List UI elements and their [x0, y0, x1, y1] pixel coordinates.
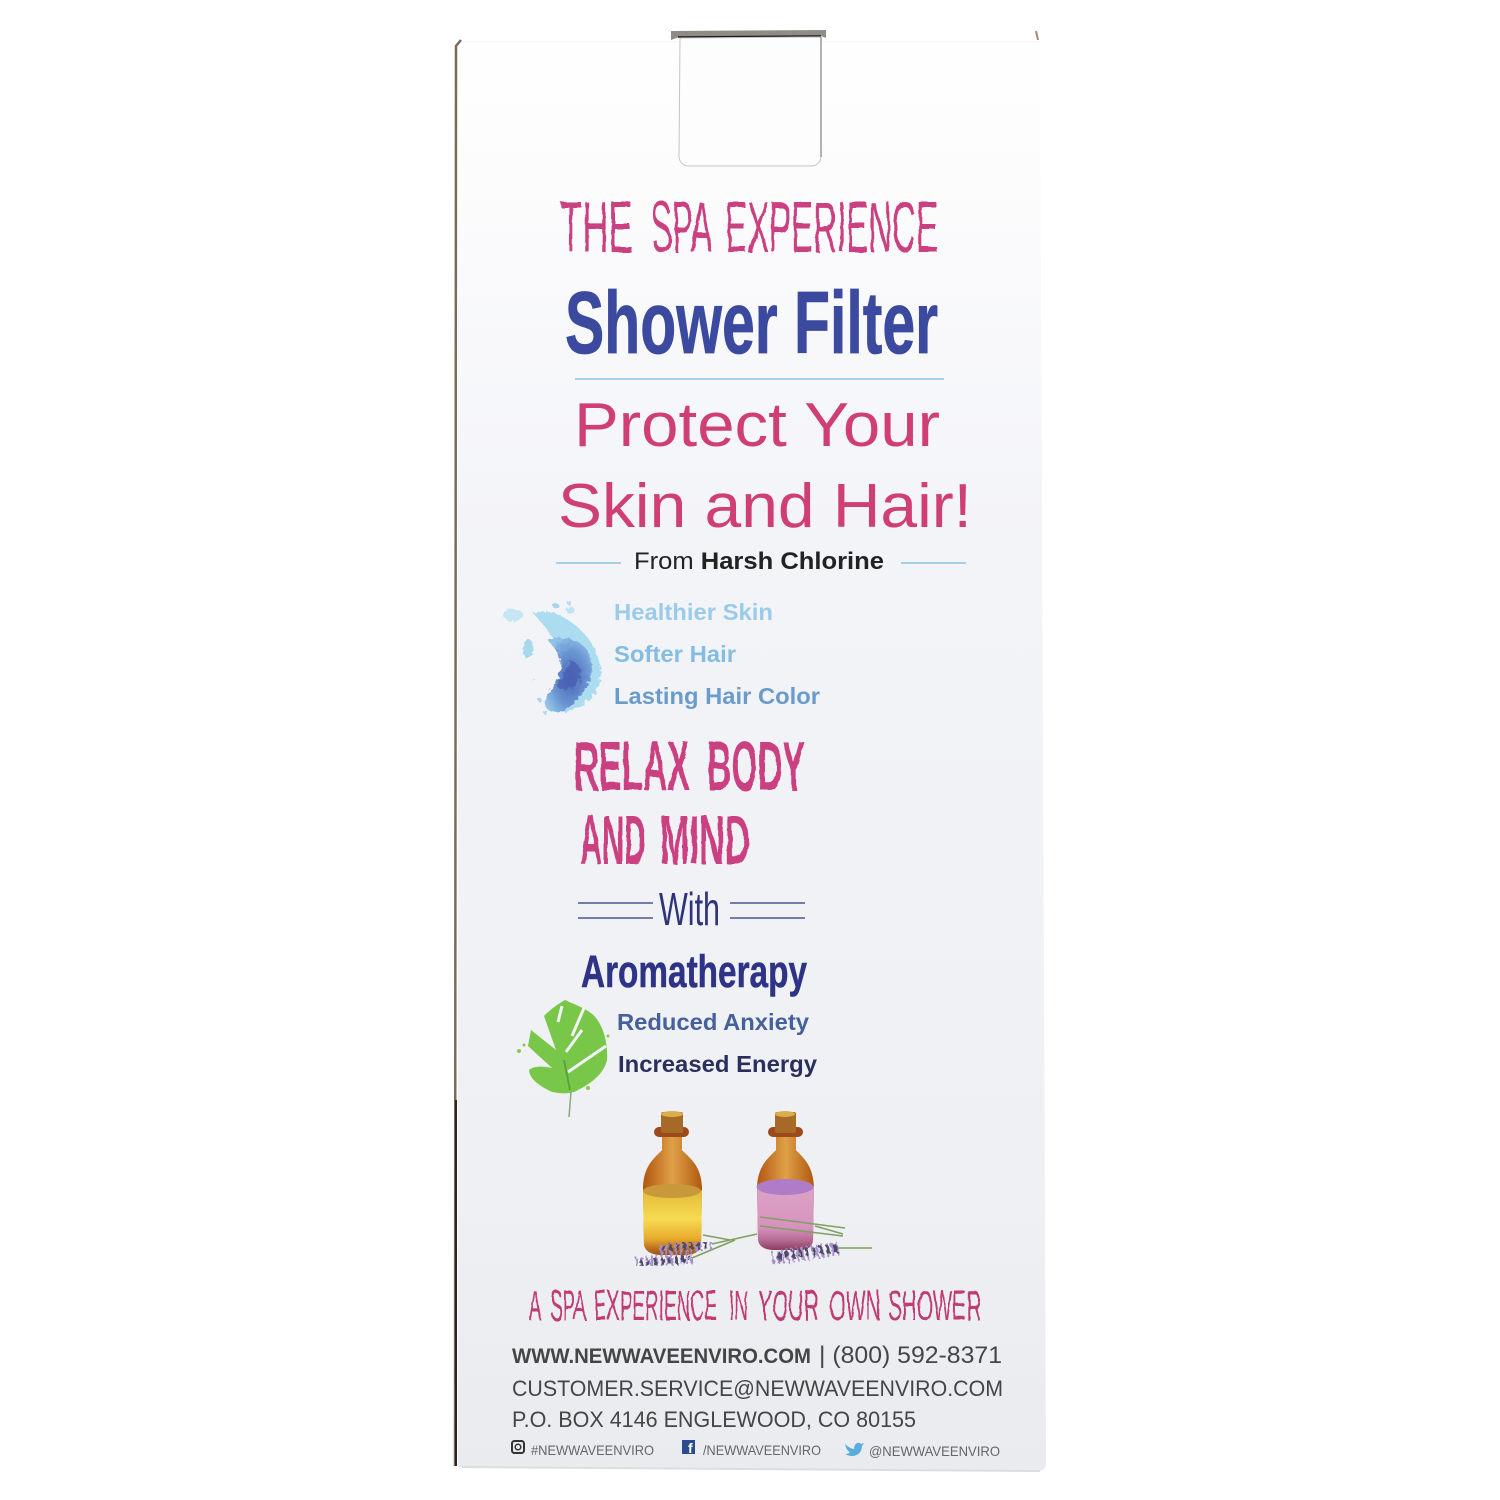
contact details: | (800) 592-8371 — [819, 1342, 1002, 1369]
product box back panel: SHOWER — [888, 1282, 981, 1330]
illustration: amber oil bottle — [643, 1111, 702, 1255]
benefits list: aromatherapy: Increased Energy — [618, 1051, 817, 1077]
product box back panel: BODY — [707, 727, 805, 805]
benefits list: aromatherapy: Reduced Anxiety — [617, 1009, 809, 1035]
illustration: lavender sprigs — [636, 1217, 872, 1264]
subheading: from harsh chlorine: From Harsh Chlorine — [634, 548, 884, 575]
box tab with metal clip — [671, 30, 826, 166]
social: facebook: /NEWWAVEENVIRO — [703, 1442, 821, 1458]
social: twitter: @NEWWAVEENVIRO — [869, 1443, 1000, 1459]
heading: the spa experience: THE — [560, 188, 633, 268]
heading: and mind: MIND — [660, 801, 750, 879]
heading: and mind: AND — [580, 801, 646, 879]
benefits list: skin and hair: Healthier Skin — [614, 599, 773, 625]
text: with: With — [659, 883, 720, 935]
heading: relax body: RELAX — [574, 727, 690, 805]
heading: skin and hair: Skin and Hair! — [558, 472, 972, 541]
box body — [455, 29, 1046, 1471]
product box back panel: EXPERIENCE — [725, 188, 938, 268]
icon: monstera leaf — [517, 1000, 610, 1117]
heading: the spa experience: SPA — [651, 188, 712, 268]
tagline: YOUR — [758, 1282, 819, 1330]
benefits list: aromatherapy — [617, 1009, 817, 1077]
heading: shower filter: Shower Filter — [565, 273, 938, 372]
tagline: OWN — [829, 1282, 881, 1330]
heading: aromatherapy: Aromatherapy — [581, 946, 807, 997]
social: facebook: f — [688, 1440, 693, 1456]
contact details: P.O. BOX 4146 ENGLEWOOD, CO 80155 — [512, 1407, 916, 1432]
tagline: A — [529, 1282, 541, 1330]
contact details — [512, 1342, 1003, 1432]
social: instagram: #NEWWAVEENVIRO — [531, 1442, 654, 1458]
benefits list: skin and hair: Softer Hair — [614, 641, 736, 667]
contact details: CUSTOMER.SERVICE@NEWWAVEENVIRO.COM — [512, 1376, 1003, 1401]
tagline: SPA — [550, 1282, 586, 1330]
tagline: IN — [729, 1282, 748, 1330]
contact details: WWW.NEWWAVEENVIRO.COM — [512, 1345, 811, 1368]
benefits list: skin and hair — [614, 599, 820, 709]
benefits list: skin and hair: Lasting Hair Color — [614, 683, 820, 709]
icon: water splash — [503, 601, 601, 714]
illustration: purple oil bottle — [756, 1111, 814, 1250]
tagline — [529, 1282, 981, 1330]
heading: the spa experience — [560, 188, 938, 268]
heading: protect your: Protect Your — [574, 391, 940, 460]
tagline: EXPERIENCE — [594, 1282, 717, 1330]
